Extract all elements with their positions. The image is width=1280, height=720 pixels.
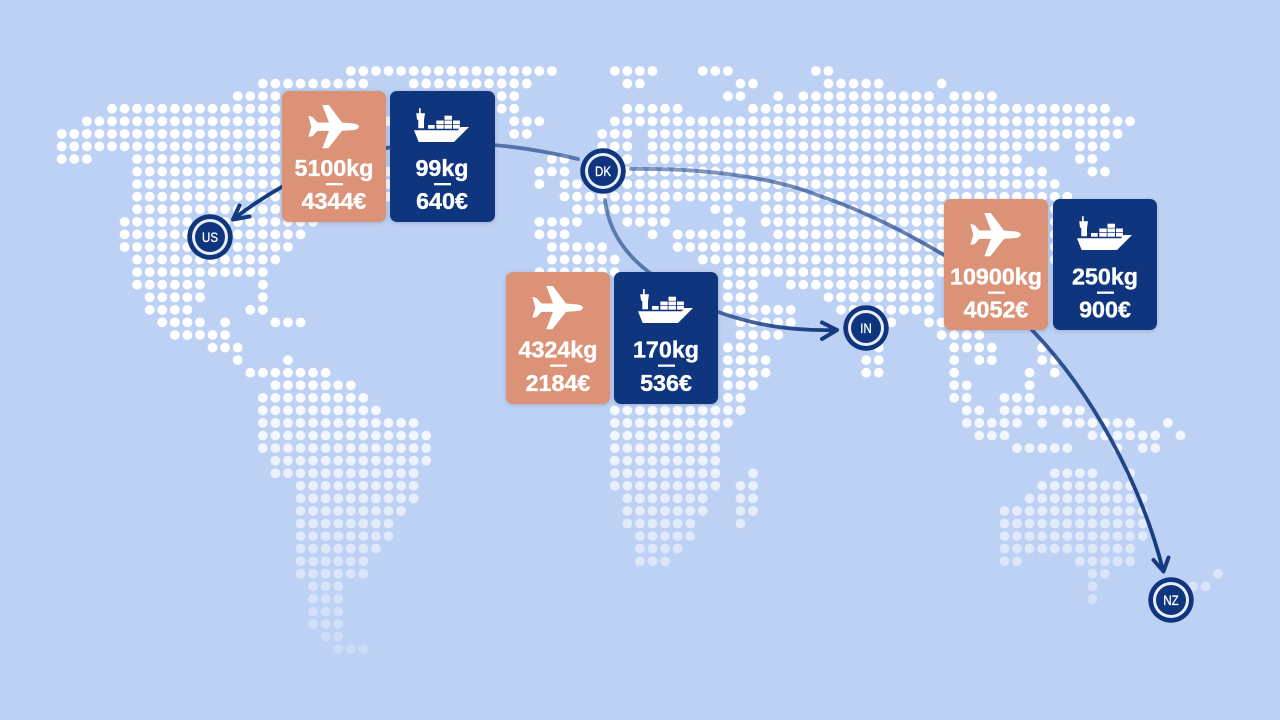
dotted world map [62,71,1218,649]
value: air weight: 5100kg [294,155,374,181]
value: air price: 4052€ [964,296,1028,322]
node: DK: DK [595,163,611,179]
value: air price: 2184€ [526,370,590,396]
panel: route to NZ air freight [944,199,1048,330]
value: air price: 4344€ [302,188,366,214]
panel: route to NZ sea freight [1053,199,1157,330]
value: air weight: 4324kg [518,336,598,362]
node: DK [580,148,626,194]
node: IN: IN [860,320,872,336]
arrow: DK to NZ [631,169,1168,572]
arrow: DK to IN [605,200,837,339]
panel: route to IN air freight [506,272,610,404]
node: US [187,214,233,260]
value: sea price: 900€ [1079,296,1131,322]
value: sea weight: 250kg [1072,264,1138,290]
panel: route to US sea freight [390,91,495,222]
value: sea weight: 99kg [415,155,469,181]
node: NZ [1148,577,1194,623]
value: air weight: 10900kg [950,264,1042,290]
panel: route to US air freight [282,91,386,222]
node: US: US [202,229,218,245]
value: sea price: 536€ [640,370,692,396]
value: sea weight: 170kg [633,336,699,362]
value: sea price: 640€ [416,188,468,214]
node: IN [843,305,889,351]
node: NZ: NZ [1163,592,1179,608]
panel: route to IN sea freight [614,272,718,404]
arrow: DK to US [233,143,578,220]
